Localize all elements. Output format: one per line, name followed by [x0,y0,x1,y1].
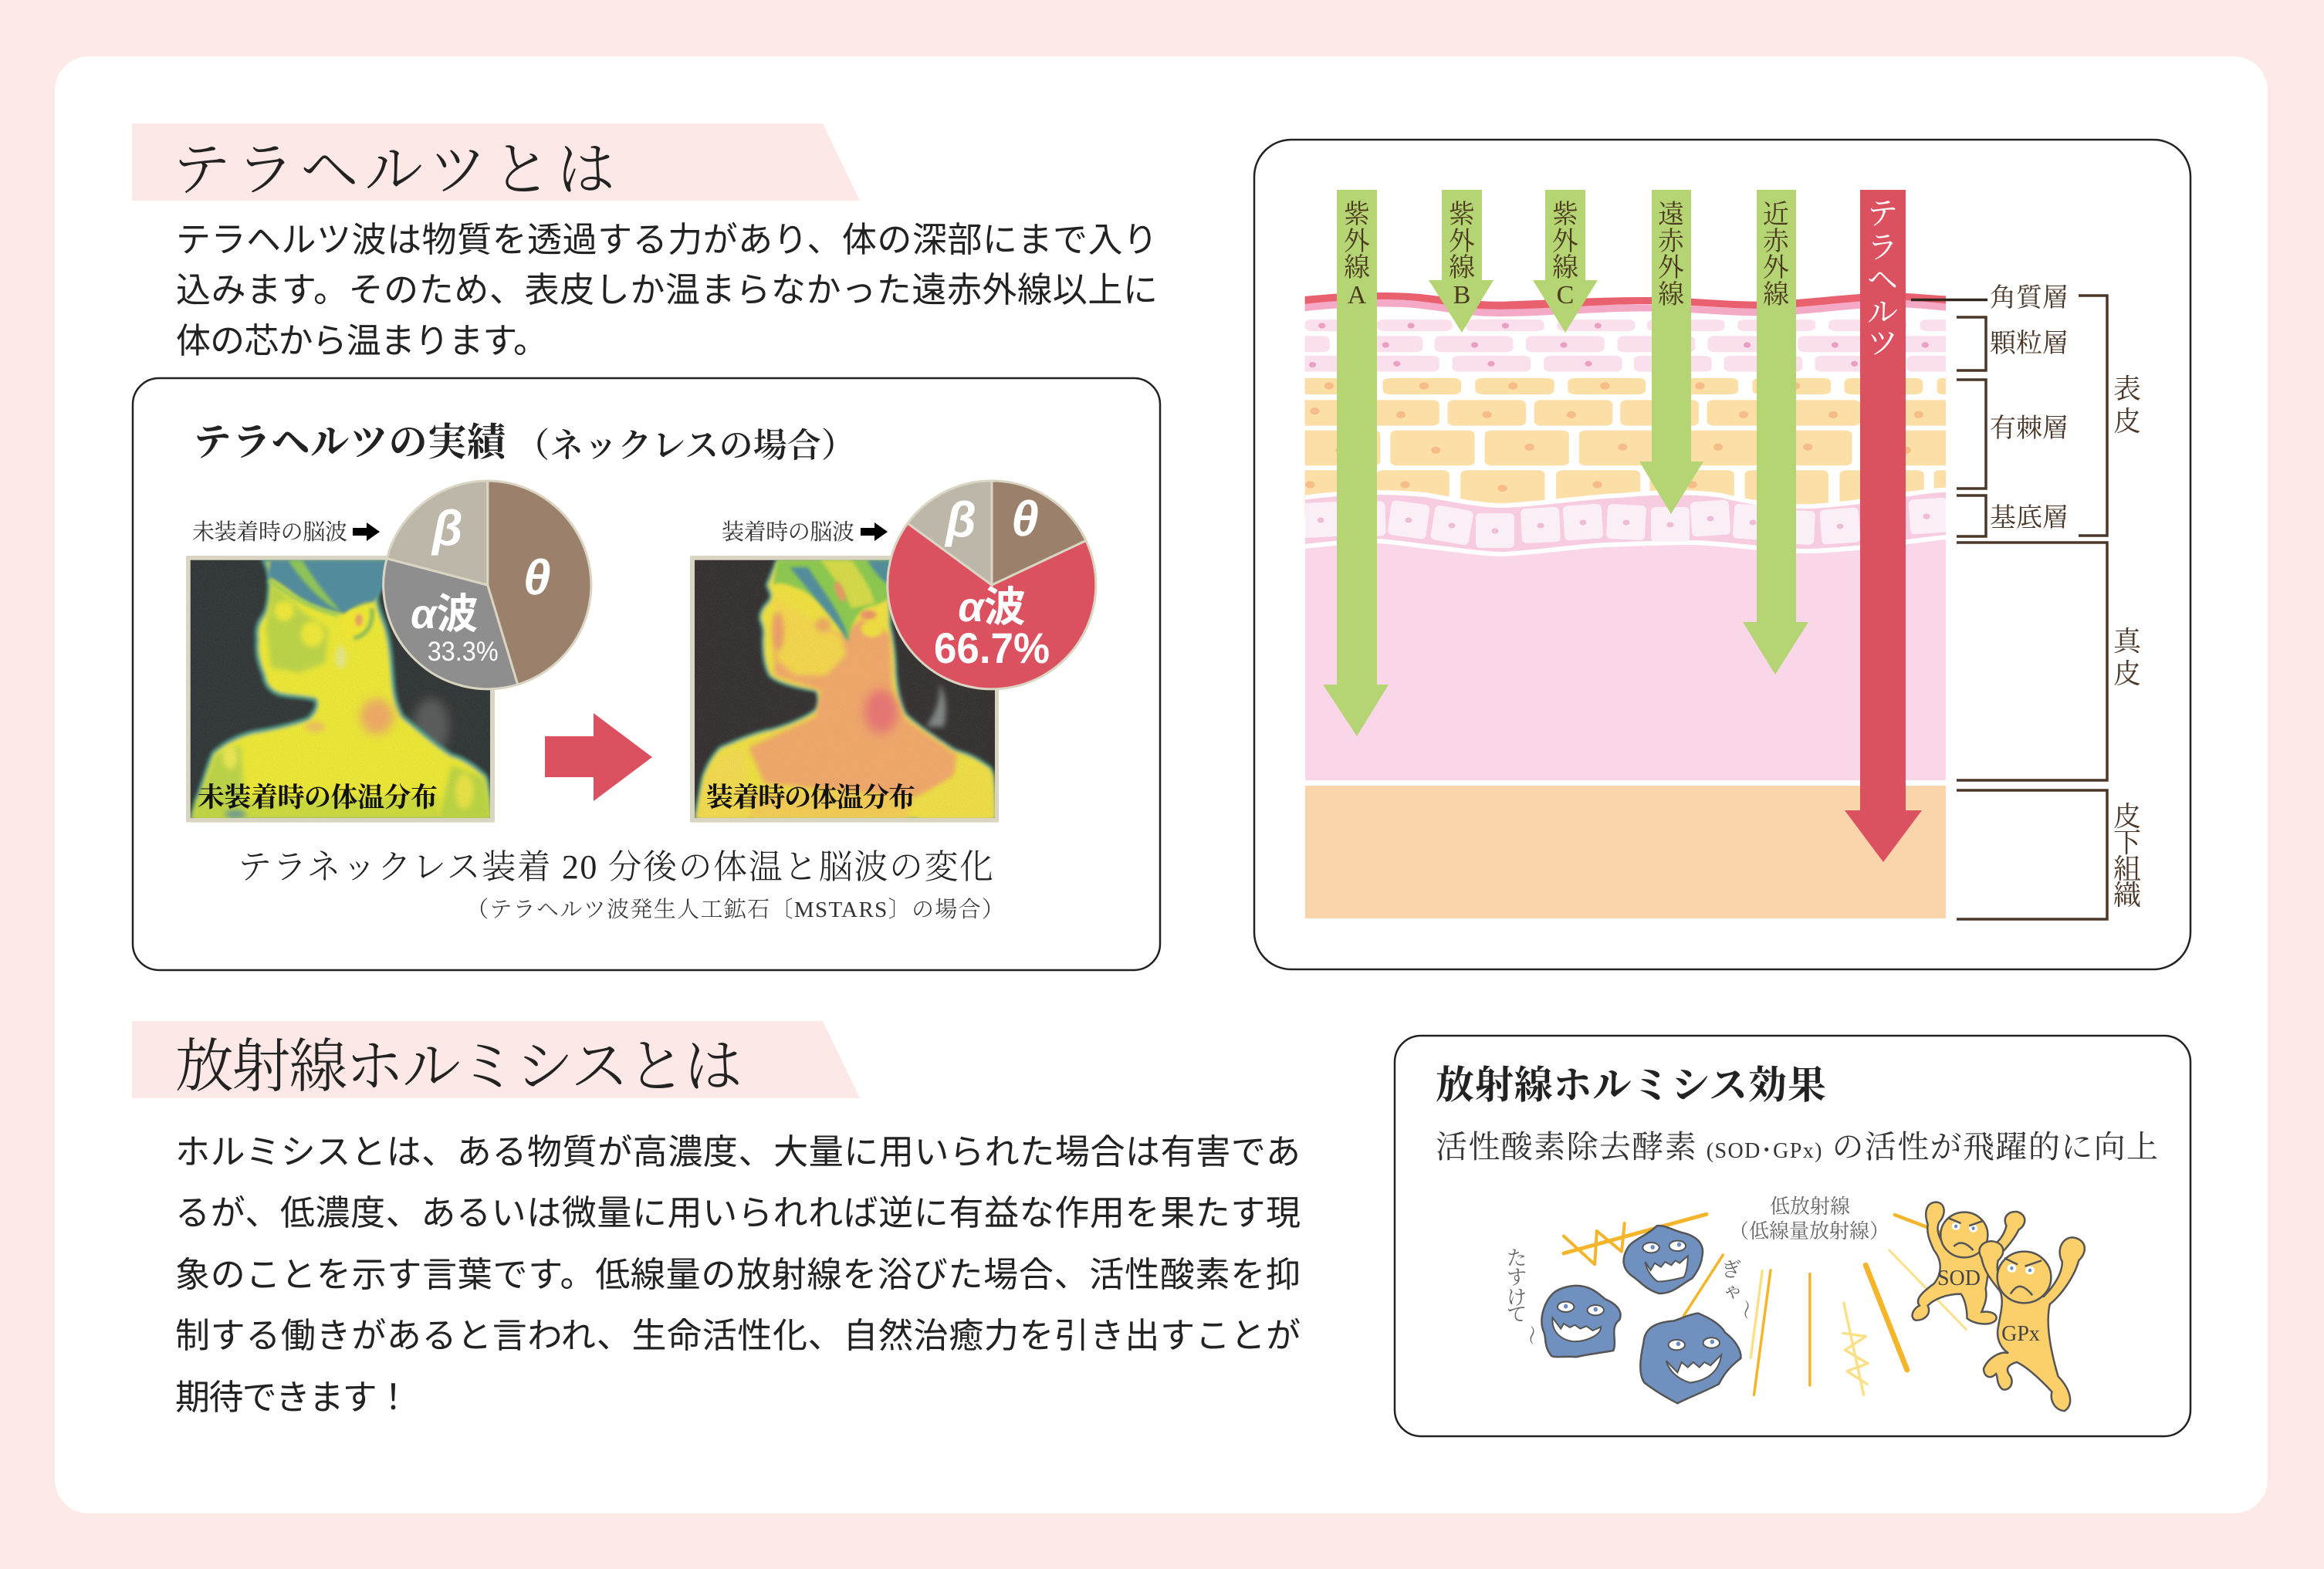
heading banner [132,1021,860,1098]
arrow: near infrared: 外 [1763,254,1789,282]
hormesis paragraph: 制する働きがあると言われ、生命活性化、自然治癒力を引き出すことが [175,1316,1301,1355]
caption: before: 未装着時の体温分布 [198,783,438,813]
arrow: UVC: 外 [1552,228,1578,256]
dermis [1305,533,1946,780]
panel subtitle: 活性酸素除去酵素 (SOD･GPx) の活性が飛躍的に向上 [1436,1129,2158,1165]
panel heading [193,421,855,465]
arrow: terahertz: テ [1867,196,1898,231]
pie chart: after [888,481,1096,689]
arrow: terahertz [1845,190,1922,862]
label: dermis: 真 [2113,626,2142,657]
label: subcutaneous: 皮 [2113,801,2141,832]
arrow: UVA: 線 [1344,253,1370,282]
hormesis paragraph: 期待できます！ [175,1378,411,1417]
label: brainwave after: 装着時の脳波 [722,519,854,545]
label: GPx: GPx [2001,1322,2040,1346]
layer labels: 顆粒層 [1990,329,2069,358]
label: dermis: 皮 [2113,658,2141,689]
arrow: near infrared: 線 [1763,280,1789,309]
arrow: terahertz: ラ [1867,230,1898,265]
layer labels: 角質層 [1990,284,2069,313]
text: help: す [1507,1266,1527,1289]
label: low radiation [1729,1195,1889,1243]
arrow: terahertz: ヘ [1867,262,1898,297]
arrow: UVB [1429,190,1494,333]
skin layers [1297,292,1955,918]
pie labels: after: θ [1011,491,1039,546]
label: epidermis: 表 [2113,374,2141,404]
arrow: UVA: A [1348,281,1367,309]
monster: top [1624,1226,1703,1293]
character: GPx [1980,1237,2085,1411]
label: brainwave before: 未装着時の脳波 [192,519,347,545]
arrow: UVB: 外 [1449,228,1475,256]
text: scream wave: 〜 [1734,1300,1757,1320]
panel: necklace results [133,378,1160,970]
intro paragraph: 込みます。そのため、表皮しか温まらなかった遠赤外線以上に [176,270,1158,309]
text: help wave: 〜 [1520,1325,1542,1345]
arrow: far infrared: 赤 [1658,227,1685,256]
label: subcutaneous: 織 [2113,880,2141,911]
section: hormesis [132,1021,1301,1417]
panel caption: テラネックレス装着 20 分後の体温と脳波の変化 [238,848,993,886]
heading: 放射線ホルミシスとは [175,1035,743,1100]
pie labels: before: β [431,500,463,556]
panel: skin penetration diagram [1254,140,2190,969]
section: terahertz intro [132,123,1158,360]
brackets [1911,296,2107,919]
panel heading: （ネックレスの場合） [516,427,855,465]
arrow: UVA [1323,190,1389,736]
arrow: UVA: 外 [1344,228,1370,256]
intro paragraph: テラヘルツ波は物質を透過する力があり、体の深部にまで入り [176,220,1158,259]
pie labels: before: θ [523,549,551,605]
caption: after: 装着時の体温分布 [706,783,915,813]
intro paragraph [176,220,1158,360]
arrow: far infrared: 遠 [1658,200,1684,229]
pie labels: after: α波 [958,584,1026,631]
pie labels: after: 66.7% [934,624,1050,672]
arrow: UVB: 線 [1449,253,1475,282]
text: scream: ぎ [1721,1259,1741,1281]
radiation lines [1564,1214,1966,1395]
arrow: far infrared [1639,190,1703,514]
heading banner [132,123,860,201]
heading: テラヘルツとは [172,138,615,203]
pie labels: after [934,491,1050,672]
character: SOD [1913,1202,2025,1324]
basal layer [1297,492,1953,552]
monster: bottom [1640,1314,1740,1403]
hormesis paragraph: るが、低濃度、あるいは微量に用いられれば逆に有益な作用を果たす現 [175,1193,1301,1233]
layer labels: 有棘層 [1990,414,2069,443]
thermal image: after [690,556,999,823]
hormesis paragraph: 象のことを示す言葉です。低線量の放射線を浴びた場合、活性酸素を抑 [175,1255,1301,1294]
panel: hormesis effect [1395,1036,2190,1436]
arrow: UVC: 紫 [1552,200,1578,229]
arrow: UVB: B [1453,281,1470,309]
arrow: UVA: 紫 [1344,200,1370,229]
arrow: terahertz: ル [1867,295,1898,330]
label: SOD: SOD [1937,1266,1981,1290]
hormesis paragraph: ホルミシスとは、ある物質が高濃度、大量に用いられた場合は有害であ [175,1132,1301,1172]
monster: left [1541,1286,1621,1357]
text: scream: ゃ [1723,1280,1743,1302]
arrow: terahertz: ツ [1867,326,1898,360]
pie labels: before: 33.3% [428,637,499,667]
text: help: た [1507,1247,1527,1270]
arrow: near infrared: 近 [1763,200,1789,229]
pie labels: after: β [944,492,976,547]
basal cells [1301,497,1949,548]
text: help: け [1507,1287,1527,1309]
label: low radiation: （低線量放射線） [1729,1220,1889,1243]
pie labels: before [411,500,551,667]
thermal image: before [186,556,495,823]
hormesis paragraph [175,1132,1301,1417]
label: subcutaneous: 下 [2113,827,2141,858]
label: epidermis: 皮 [2113,406,2141,437]
layer labels [1990,284,2069,533]
granular layer cells [1299,320,1955,372]
subcutaneous tissue [1305,786,1946,918]
arrow: near infrared: 赤 [1763,227,1790,256]
arrow: UVC: C [1557,281,1574,309]
arrow: UVC: 線 [1552,253,1578,282]
pie chart: before [384,481,591,689]
arrow: near infrared [1743,190,1808,675]
arrow: far infrared: 外 [1658,254,1684,282]
text: help: て [1507,1304,1527,1326]
stratum corneum [1305,299,1946,316]
intro paragraph: 体の芯から温まります。 [176,321,548,360]
illustration [1541,1202,2085,1411]
arrow: far infrared: 線 [1658,280,1684,309]
pie labels: before: α波 [411,591,478,637]
label: low radiation: 低放射線 [1770,1195,1850,1218]
panel heading: テラヘルツの実績 [193,421,511,464]
layer labels: 基底層 [1990,504,2069,533]
arrow: UVC [1533,190,1598,333]
arrow: before to after [545,713,652,801]
panel note: （テラヘルツ波発生人工鉱石〔MSTARS〕の場合） [466,897,1004,922]
label: subcutaneous: 組 [2113,854,2141,884]
panel heading: 放射線ホルミシス効果 [1436,1063,1826,1107]
spinous layer cells [1299,378,1954,516]
arrow: UVB: 紫 [1449,200,1475,229]
